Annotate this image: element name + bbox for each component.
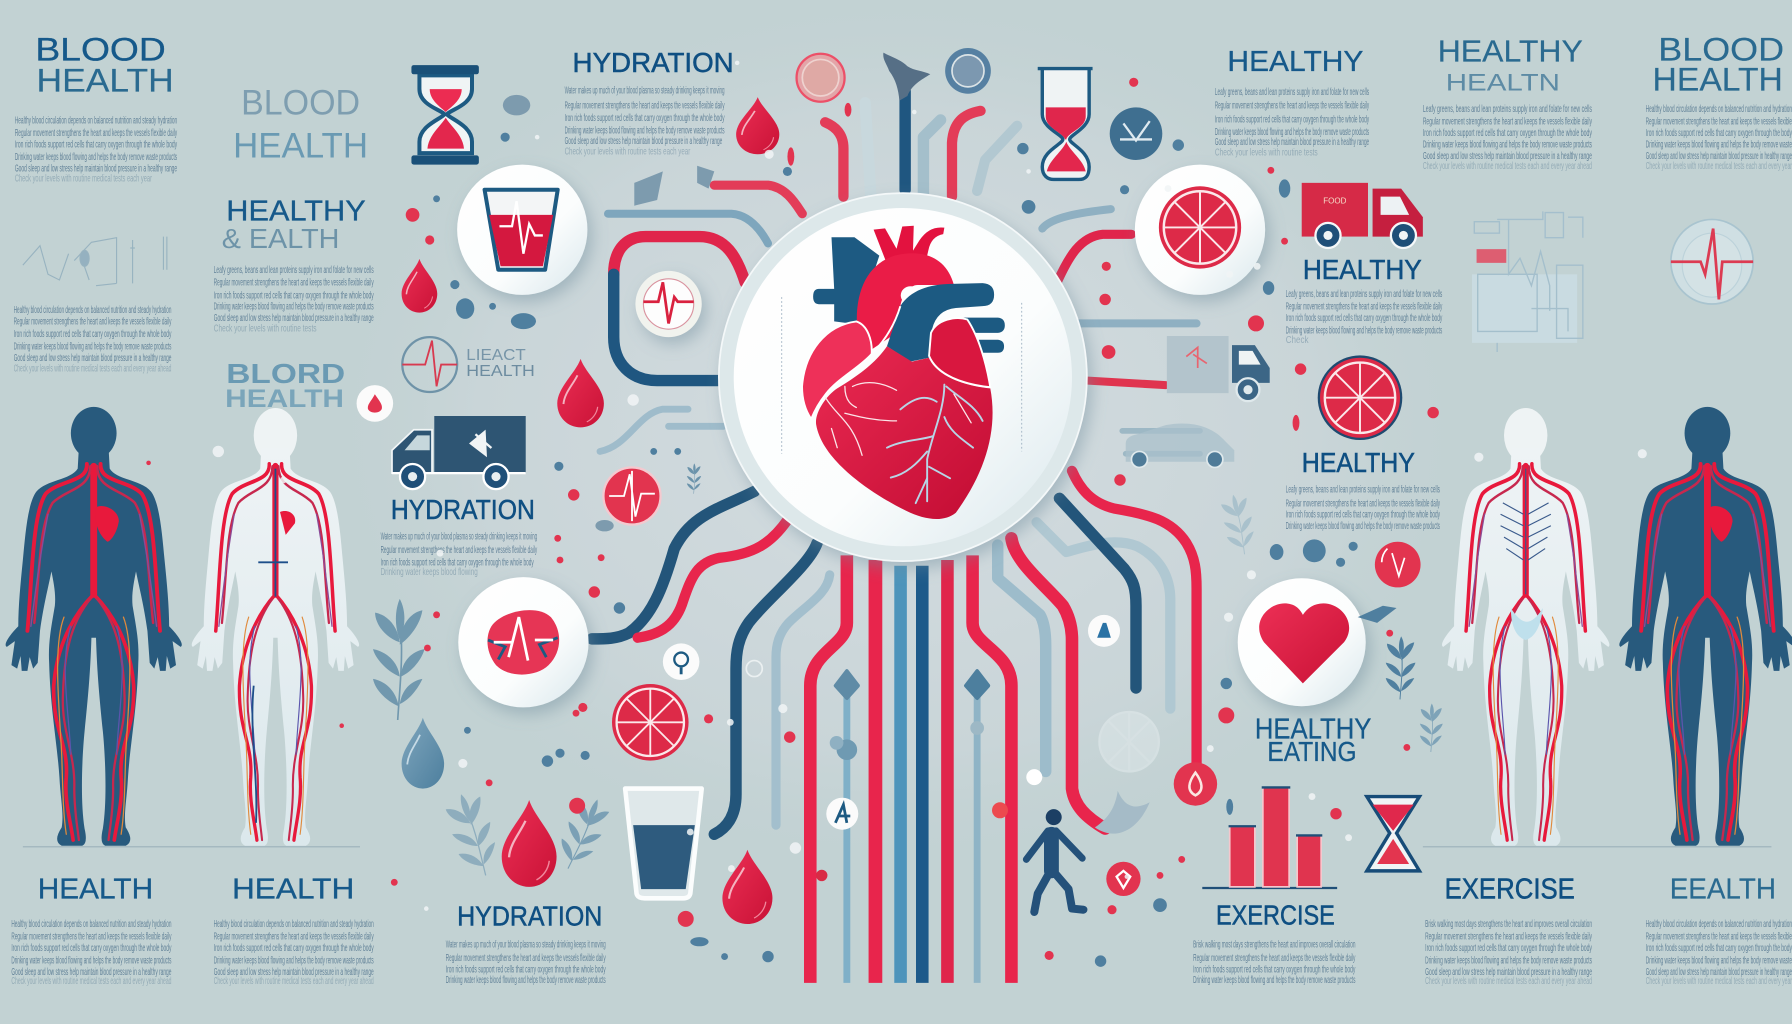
icon: glass with ecg in white circle	[457, 165, 587, 295]
text: Regular movement strengthens the heart and keeps the vessels flexible daily	[1286, 498, 1440, 509]
heading: Healthy citrus: HEALTHY	[1302, 447, 1415, 478]
text block: bottom exercise	[1193, 939, 1355, 986]
icon: blood drop centre left	[557, 359, 604, 427]
bar chart	[1202, 787, 1337, 888]
text block: healthy healtn: Good sleep and low stress help maintain blood pressure in a healthy range	[1423, 151, 1592, 162]
text: Leafy greens, beans and lean proteins supply iron and folate for new cells	[214, 265, 374, 276]
text: Water makes up much of your blood plasma so steady drinking keeps it moving	[565, 86, 725, 97]
icon: heart in white circle	[1238, 578, 1366, 706]
text: Drinking water keeps blood flowing and helps the body remove waste products	[214, 955, 374, 966]
text block: bottom right exercise	[1425, 919, 1592, 987]
icon: red truck: FOOD	[1323, 196, 1347, 205]
heading: Blord Health: BLORD	[226, 358, 345, 389]
heading: faded Blood Health: HEALTH	[233, 126, 368, 166]
swirl at pipe end	[1095, 791, 1150, 834]
plant: small right sprig	[1420, 704, 1443, 752]
text block: top-left	[15, 115, 177, 185]
icon: blood drop top	[736, 97, 779, 154]
blue particles	[433, 95, 1397, 967]
text block: top-right	[1646, 104, 1792, 172]
text block: bottom right exercise: Iron rich foods support red cells that carry oxygen through the whole body	[1425, 943, 1592, 954]
text block: healthy healtn	[1423, 104, 1592, 172]
text block: bottom right exercise: Check your levels with routine medical tests each and every year ahead	[1425, 976, 1592, 987]
heading: Exercise right: EXERCISE	[1445, 873, 1575, 905]
text: Iron rich foods support red cells that carry oxygen through the whole body	[1286, 313, 1442, 324]
text: Iron rich foods support red cells that carry oxygen through the whole body	[446, 965, 606, 976]
icon: hourglass bottom right	[1367, 797, 1419, 871]
icon: faded citrus	[1099, 712, 1159, 771]
heading: Healthy red truck: HEALTHY	[1303, 254, 1422, 285]
icon: ecg outline ring	[402, 337, 457, 392]
text: Regular movement strengthens the heart and keeps the vessels flexible daily	[381, 545, 537, 556]
icon: grey truck	[1167, 336, 1270, 401]
heading: Health second: HEALTH	[232, 873, 354, 905]
text block: bottom hydration	[446, 939, 606, 986]
bar one	[1230, 826, 1255, 887]
plant: left leaves	[373, 599, 424, 720]
text: Regular movement strengthens the heart and keeps the vessels flexible daily	[1193, 953, 1355, 964]
text block: citrus healthy	[1286, 485, 1440, 532]
text: Drinking water keeps blood flowing and helps the body remove waste products	[1193, 975, 1355, 986]
text: Leafy greens, beans and lean proteins supply iron and folate for new cells	[1286, 289, 1442, 300]
text: Healthy blood circulation depends on balanced nutrition and steady hydration	[11, 919, 171, 930]
bar two	[1263, 787, 1289, 887]
text: Water makes up much of your blood plasma so steady drinking keeps it moving	[446, 939, 606, 950]
icon: white drop badge	[357, 385, 393, 422]
icon: water drop	[402, 718, 444, 789]
icon: blue badge	[945, 48, 991, 94]
heading: Blood Health top-right: HEALTH	[1653, 61, 1783, 97]
text block: healthy healtn: Iron rich foods support red cells that carry oxygen through the whole body	[1423, 128, 1592, 139]
icon: hourglass top-left	[411, 65, 479, 165]
heading: Hydration truck: HYDRATION	[391, 494, 535, 525]
heading: Healthy & Ealth	[222, 196, 366, 254]
text: Drinking water keeps blood flowing and helps the body remove waste products	[11, 955, 171, 966]
text: Healthy blood circulation depends on balanced nutrition and steady hydration	[214, 919, 374, 930]
text: Regular movement strengthens the heart and keeps the vessels flexible daily	[11, 931, 171, 942]
heading: faded Blood Health	[233, 82, 368, 166]
icon: ecg badge on looped pipe	[635, 271, 702, 337]
text: Drinking water keeps blood flowing and helps the body remove waste products	[1425, 955, 1592, 966]
text: Iron rich foods support red cells that carry oxygen through the whole body	[15, 139, 177, 150]
text: Brisk walking most days strengthens the heart and improves overall circulation	[1425, 919, 1592, 930]
text: Leafy greens, beans and lean proteins supply iron and folate for new cells	[1215, 87, 1369, 98]
text: Iron rich foods support red cells that carry oxygen through the whole body	[1193, 965, 1355, 976]
text block: red truck healthy: Check	[1286, 335, 1309, 346]
text: Iron rich foods support red cells that carry oxygen through the whole body	[214, 290, 374, 301]
heading: Eealth: EEALTH	[1670, 873, 1776, 905]
text block: left middle	[14, 305, 172, 374]
heading: Hydration bottom: HYDRATION	[457, 901, 602, 932]
text: Good sleep and low stress help maintain blood pressure in a healthy range	[14, 353, 172, 364]
plant: small left	[687, 463, 701, 494]
text: Check your levels with routine medical tests each and every year ahead	[14, 363, 171, 374]
heading: Blood Health top-left: HEALTH	[37, 62, 174, 98]
icon: red shield badge	[1106, 862, 1141, 896]
text block: top-left: Check your levels with routine medical tests each year	[15, 174, 152, 185]
text: Iron rich foods support red cells that carry oxygen through the whole body	[11, 943, 171, 954]
text block: healthy top right: Check your levels with routine tests	[1215, 147, 1318, 158]
heading: Healthy Healtn	[1438, 34, 1583, 96]
text: Drinking water keeps blood flowing and helps the body remove waste products	[214, 302, 374, 313]
heading: Blood Health top-right: BLOOD	[1658, 32, 1784, 68]
heading: Blord Health: HEALTH	[225, 385, 344, 413]
plant: hydration right	[552, 793, 613, 875]
heading: Exercise bars: EXERCISE	[1216, 900, 1335, 931]
dotted guide lines	[782, 297, 1022, 454]
icon: water glass	[625, 789, 702, 898]
text block: truck hydration	[381, 531, 537, 578]
icon: red truck	[1302, 183, 1423, 248]
text block: hydration top	[565, 86, 725, 157]
text: Regular movement strengthens the heart and keeps the vessels flexible daily	[214, 278, 374, 289]
heading: Healthy & Ealth: HEALTHY	[226, 196, 366, 228]
text: Healthy blood circulation depends on balanced nutrition and steady hydration	[15, 115, 177, 126]
text: Drinking water keeps blood flowing and helps the body remove waste products	[1423, 139, 1592, 150]
text: Regular movement strengthens the heart and keeps the vessels flexible daily	[446, 953, 606, 964]
icon: pink badge	[797, 54, 845, 102]
heading: Blood Health top-left	[35, 32, 174, 98]
pipelines radiating from the heart	[592, 53, 1200, 983]
text: Regular movement strengthens the heart and keeps the vessels flexible daily	[14, 317, 171, 328]
text: Good sleep and low stress help maintain blood pressure in a healthy range	[1215, 137, 1369, 148]
heading: small Heart Health: HEALTH	[466, 363, 535, 380]
text: Good sleep and low stress help maintain blood pressure in a healthy range	[214, 967, 374, 978]
icon: citrus in white circle	[1135, 165, 1265, 295]
icon: citrus right	[1318, 355, 1402, 440]
heading: Healthy Eating	[1255, 713, 1371, 767]
icon: walking person	[1026, 809, 1083, 912]
text: Good sleep and low stress help maintain blood pressure in a healthy range	[214, 313, 374, 324]
heading: Hydration top: HYDRATION	[573, 47, 734, 78]
heading: Health left: HEALTH	[38, 873, 153, 905]
text: Iron rich foods support red cells that carry oxygen through the whole body	[1286, 510, 1440, 521]
text block: healthy and health	[214, 265, 374, 334]
text: Regular movement strengthens the heart and keeps the vessels flexible daily	[15, 128, 177, 139]
text: Regular movement strengthens the heart and keeps the vessels flexible daily	[565, 101, 725, 112]
icon: navy truck	[392, 416, 526, 489]
text: Regular movement strengthens the heart and keeps the vessels flexible daily	[214, 931, 374, 942]
plant: faded sprig	[1219, 492, 1259, 557]
white particles	[213, 61, 1647, 911]
icon: navy check badge	[1110, 107, 1162, 160]
text: Drinking water keeps blood flowing and helps the body remove waste products	[565, 126, 725, 137]
icon: white letter badge	[826, 798, 858, 830]
icon: white person badge	[663, 643, 699, 680]
human figure: right dark	[1619, 407, 1792, 846]
text: Good sleep and low stress help maintain blood pressure in a healthy range	[15, 163, 177, 174]
text: Brisk walking most days strengthens the heart and improves overall circulation	[1193, 939, 1355, 950]
icon: blood drop bottom hydration	[502, 800, 557, 887]
text block: bottom second: Check your levels with routine medical tests each and every year ahead	[214, 976, 374, 987]
text block: healthy healtn: Leafy greens, beans and lean proteins supply iron and folate for new cells	[1423, 104, 1592, 115]
plant: hydration left	[441, 788, 505, 881]
icon: blood drop	[402, 259, 437, 313]
text: Drinking water keeps blood flowing and helps the body remove waste products	[1215, 127, 1369, 138]
human figure: left light	[192, 408, 359, 846]
heading: Healthy Eating: EATING	[1267, 736, 1357, 767]
heading: small Heart Health: LIEACT	[466, 347, 526, 364]
text: Iron rich foods support red cells that carry oxygen through the whole body	[1215, 114, 1369, 125]
sketch: left faint medical drawing	[23, 237, 167, 286]
text block: healthy and health: Check your levels with routine tests	[214, 323, 317, 334]
bar three	[1297, 835, 1321, 887]
heading: Blood Health top-right	[1653, 32, 1784, 97]
icon: citrus bottom left	[612, 684, 689, 761]
text: Drinking water keeps blood flowing and helps the body remove waste products	[1286, 326, 1442, 337]
text: Regular movement strengthens the heart and keeps the vessels flexible daily	[1423, 117, 1592, 128]
icon: blood drop bottom centre	[722, 850, 772, 924]
central heart medallion	[719, 193, 1087, 561]
medallion inner disc	[734, 208, 1072, 546]
lower pipes	[592, 471, 1197, 983]
text block: red truck healthy	[1286, 289, 1442, 346]
text: Drinking water keeps blood flowing and helps the body remove waste products	[1286, 521, 1440, 532]
text: Regular movement strengthens the heart and keeps the vessels flexible daily	[1425, 931, 1592, 942]
text: Healthy blood circulation depends on balanced nutrition and steady hydration	[14, 305, 171, 316]
text block: bottom second	[214, 919, 374, 987]
text block: bottom left: Check your levels with routine medical tests each and every year ahead	[11, 976, 171, 987]
text: Iron rich foods support red cells that carry oxygen through the whole body	[14, 329, 171, 340]
icon: hourglass top middle	[1038, 69, 1093, 179]
icon: faint car	[1126, 423, 1234, 467]
text block: healthy top right	[1215, 87, 1369, 158]
text: Drinking water keeps blood flowing and helps the body remove waste products	[15, 152, 177, 163]
text: Drinking water keeps blood flowing and helps the body remove waste products	[446, 975, 606, 986]
medallion ring	[719, 193, 1087, 561]
heading: Healthy Eating: HEALTHY	[1255, 713, 1371, 745]
heading: Blood Health top-left: BLOOD	[35, 32, 166, 68]
figure ground lines	[23, 846, 1771, 848]
upper pipes	[600, 53, 1200, 454]
heading: Blord Health	[225, 358, 345, 413]
heading: faded Blood Health: BLOOD	[241, 82, 360, 122]
plant: right leaves	[1386, 636, 1415, 699]
text: Regular movement strengthens the heart and keeps the vessels flexible daily	[1215, 101, 1369, 112]
text: Drinking water keeps blood flowing and helps the body remove waste products	[14, 342, 171, 353]
text block: healthy healtn: Check your levels with routine medical tests each and every year ahead	[1423, 161, 1592, 172]
icon: white bottle badge	[1088, 615, 1120, 647]
text: Iron rich foods support red cells that carry oxygen through the whole body	[565, 113, 725, 124]
text: Good sleep and low stress help maintain blood pressure in a healthy range	[565, 136, 722, 147]
heading: Healthy & Ealth: & EALTH	[222, 223, 339, 254]
text: Good sleep and low stress help maintain blood pressure in a healthy range	[11, 967, 172, 978]
heading: Healthy Healtn: HEALTHY	[1438, 34, 1583, 69]
text block: hydration top: Check your levels with routine tests each year	[565, 146, 691, 157]
sketch: right faint medical drawing	[1472, 211, 1583, 352]
icon: small red ecg citrus	[603, 467, 661, 525]
human figure: right light	[1442, 408, 1609, 846]
scattered particles	[146, 61, 1647, 967]
text: Water makes up much of your blood plasma so steady drinking keeps it moving	[381, 531, 537, 542]
icon: red check badge	[1375, 542, 1421, 587]
icon: faint ecg globe	[1671, 219, 1753, 304]
heading: small Heart Health	[466, 347, 535, 380]
text: Iron rich foods support red cells that carry oxygen through the whole body	[381, 558, 534, 569]
text block: bottom left	[11, 919, 172, 987]
heading: Healthy Healtn: HEALTN	[1446, 69, 1560, 96]
icon: red heartbeat knot in white circle	[458, 577, 589, 707]
icon: red pipe terminal	[1174, 762, 1217, 806]
pipe nodes	[816, 671, 1042, 881]
text block: bottom right exercise: Good sleep and low stress help maintain blood pressure in a healthy range	[1425, 967, 1592, 978]
heart illustration	[802, 226, 1005, 519]
text block: truck hydration: Drinking water keeps blood flowing	[381, 567, 478, 578]
text: Leafy greens, beans and lean proteins supply iron and folate for new cells	[1286, 485, 1440, 496]
text block: bottom right	[1646, 919, 1792, 987]
text: Regular movement strengthens the heart and keeps the vessels flexible daily	[1286, 302, 1442, 313]
red particles	[146, 78, 1439, 960]
heading: Healthy top right: HEALTHY	[1227, 46, 1363, 78]
human figure: left dark	[6, 407, 182, 846]
text: Iron rich foods support red cells that carry oxygen through the whole body	[214, 943, 374, 954]
